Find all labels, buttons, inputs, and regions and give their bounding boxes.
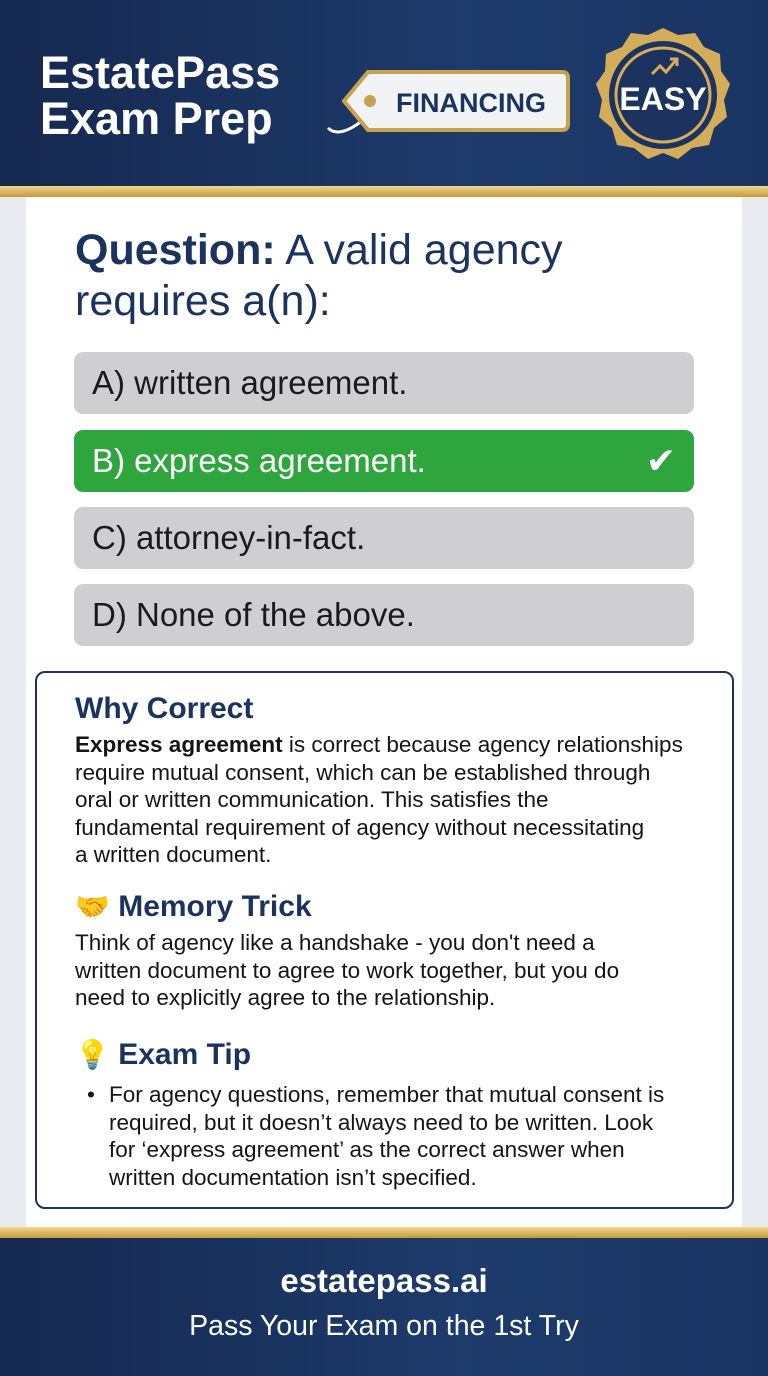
option B correct <box>74 430 694 492</box>
exam tip <box>75 1038 664 1190</box>
option D: D) None of the above. <box>92 596 415 633</box>
tag: financing <box>327 70 570 134</box>
exam tip: 💡 Exam Tip <box>75 1038 251 1071</box>
option A <box>74 352 694 414</box>
why correct: fundamental requirement of agency without necessitating <box>75 814 644 840</box>
why correct: Why Correct <box>75 692 253 725</box>
memory trick: 🤝 Memory Trick <box>75 890 312 923</box>
exam tip: For agency questions, remember that mutual consent is <box>109 1082 664 1107</box>
option C <box>74 507 694 569</box>
option C: C) attorney-in-fact. <box>92 519 365 556</box>
question: requires a(n): <box>75 277 331 325</box>
option D <box>74 584 694 646</box>
tag: financing: FINANCING <box>396 88 546 118</box>
memory trick: written document to agree to work together, but you do <box>75 958 619 982</box>
footer <box>0 1238 768 1376</box>
exam tip: • <box>87 1082 95 1107</box>
option B correct: B) express agreement. <box>92 442 426 479</box>
memory trick: Think of agency like a handshake - you don't need a <box>75 930 595 955</box>
footer: Pass Your Exam on the 1st Try <box>189 1310 579 1342</box>
why correct <box>75 692 683 867</box>
exam tip: for ‘express agreement’ as the correct answer when <box>109 1137 625 1162</box>
option A: A) written agreement. <box>92 364 407 401</box>
why correct: require mutual consent, which can be established through <box>75 760 650 784</box>
exam tip: written documentation isn’t specified. <box>109 1164 477 1190</box>
title: Exam Prep <box>40 93 273 144</box>
footer: estatepass.ai <box>280 1262 488 1299</box>
card <box>26 197 742 1227</box>
title: EstatePass <box>40 47 280 98</box>
badge: easy: EASY <box>619 81 707 117</box>
explanation panel <box>35 671 734 1209</box>
why correct: a written document. <box>75 842 271 867</box>
question: Question: A valid agency <box>75 226 563 274</box>
why correct: oral or written communication. This satisfies the <box>75 787 549 812</box>
memory trick <box>75 890 619 1010</box>
memory trick: need to explicitly agree to the relationship. <box>75 985 495 1010</box>
title <box>40 47 280 144</box>
exam tip: required, but it doesn’t always need to be written. Look <box>109 1110 653 1134</box>
why correct: Express agreement is correct because agency relationships <box>75 732 683 757</box>
question <box>75 226 563 325</box>
header <box>0 0 768 188</box>
option B correct: ✔ <box>646 440 676 481</box>
badge: easy <box>596 28 730 159</box>
